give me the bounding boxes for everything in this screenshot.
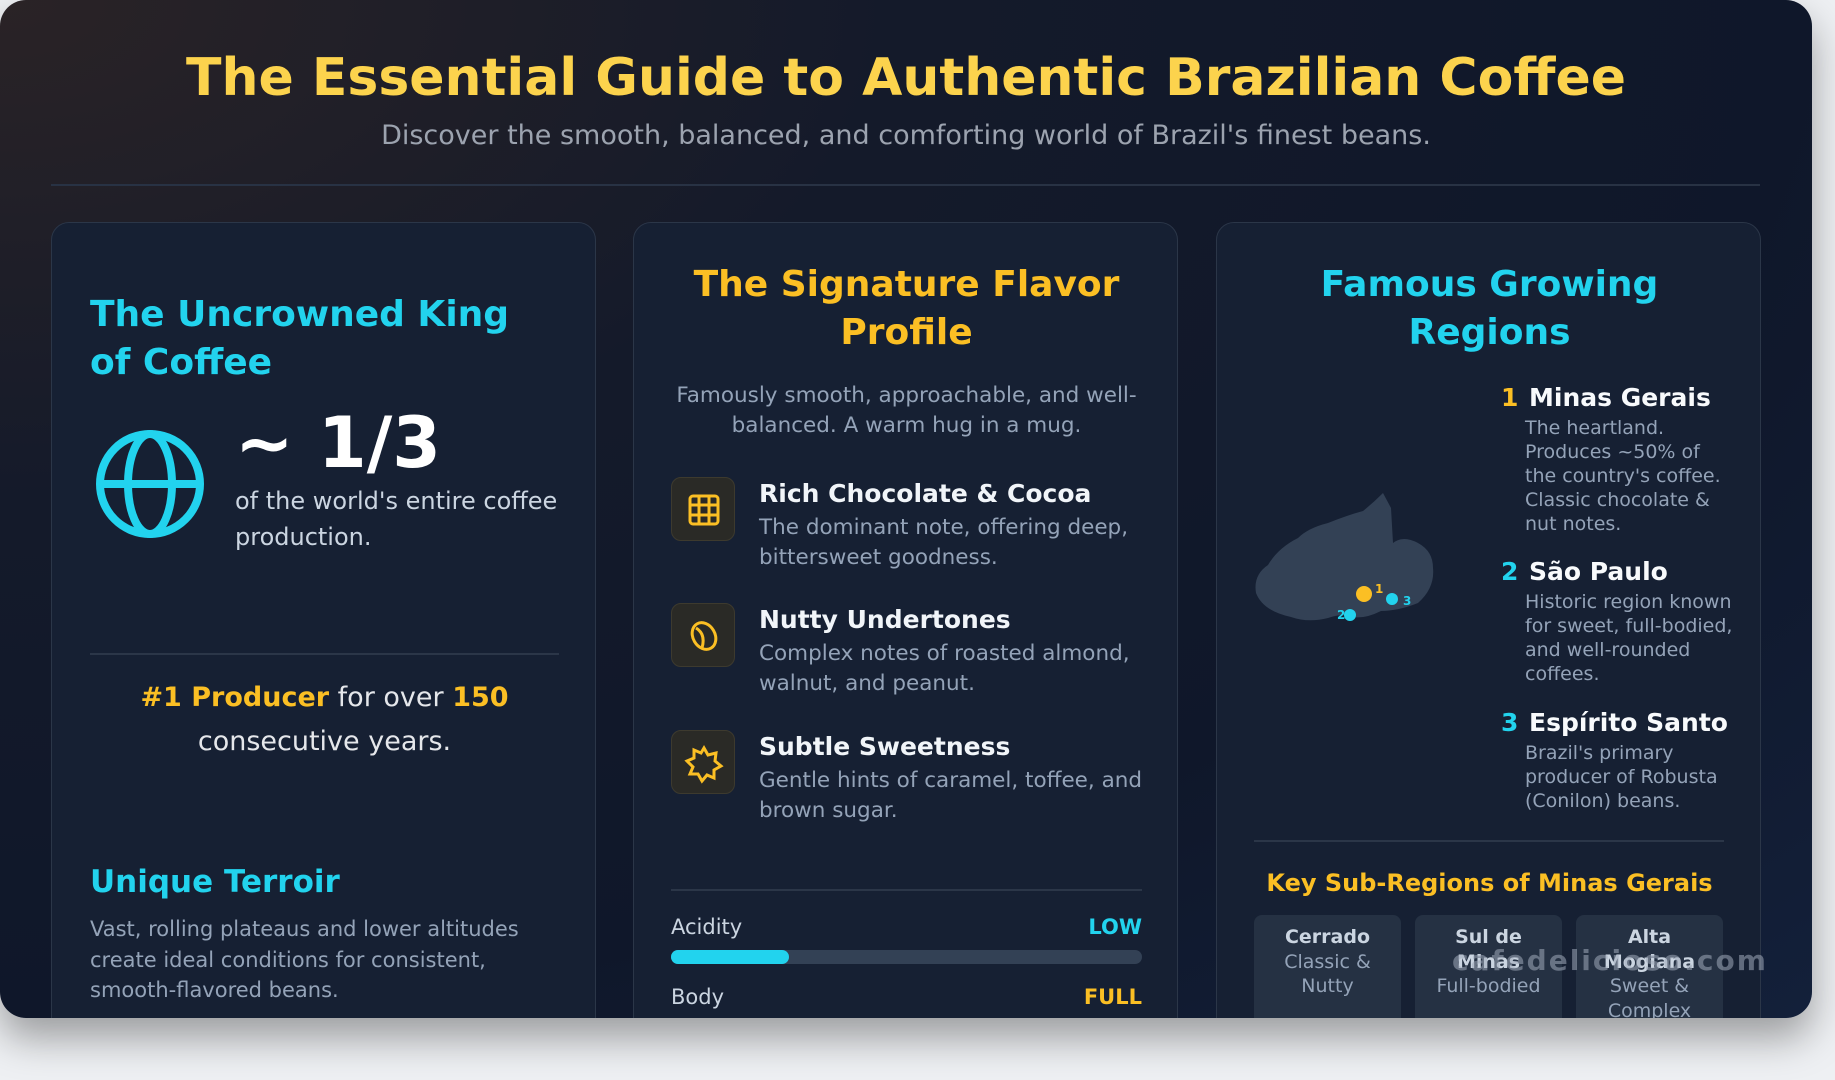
sub-region boxes: Classic & <box>1284 950 1371 972</box>
heading: Profile <box>840 312 973 353</box>
heading: Famous Growing <box>1321 264 1658 305</box>
heading <box>694 264 1120 353</box>
map <box>1256 493 1434 622</box>
chart: acidity: LOW <box>1088 915 1142 939</box>
region 3 <box>1501 708 1728 812</box>
sub-region boxes: Sul de <box>1455 926 1522 948</box>
panel: flavor profile <box>633 222 1178 1052</box>
heading: of Coffee <box>90 342 272 383</box>
sub-region boxes: Minas <box>1457 950 1520 972</box>
region 1 <box>1501 383 1721 535</box>
item: nutty: Nutty Undertones <box>759 605 1011 634</box>
item: sweetness: Gentle hints of caramel, toffee, and brown sugar. <box>759 768 1142 823</box>
producer stat: #1 Producer for over 150 <box>140 682 509 713</box>
sub-region boxes: Cerrado <box>1285 926 1370 948</box>
chart: acidity: Acidity <box>671 915 742 939</box>
sub-region boxes: Alta <box>1628 926 1671 948</box>
subtitle: Discover the smooth, balanced, and comforting world of Brazil's finest beans. <box>381 120 1431 151</box>
sub-region boxes: Sweet & <box>1610 975 1689 997</box>
region 2 <box>1501 557 1732 685</box>
producer stat <box>140 682 509 757</box>
heading: Regions <box>1408 312 1571 353</box>
item: chocolate: The dominant note, offering deep, bittersweet goodness. <box>759 515 1128 570</box>
region 2: 2 <box>1501 557 1518 586</box>
item: sweetness: Subtle Sweetness <box>759 732 1010 761</box>
stat: of the world's entire coffee production. <box>235 487 557 551</box>
region 3: Espírito Santo <box>1529 708 1728 737</box>
sub-regions heading: Key Sub-Regions of Minas Gerais <box>1266 869 1713 897</box>
description: Famously smooth, approachable, and well-balanced. A warm hug in a mug. <box>676 383 1137 438</box>
region 3: 3 <box>1501 708 1518 737</box>
item: chocolate <box>671 477 1128 570</box>
map: 1 <box>1375 582 1383 596</box>
region 1: Minas Gerais <box>1529 383 1711 412</box>
sub-region boxes: Nutty <box>1301 975 1354 997</box>
panel: king of coffee <box>51 222 596 1052</box>
icon: globe <box>96 430 204 538</box>
chart: body <box>671 985 1142 1009</box>
region 2: Historic region known for sweet, full-bodied, and well-rounded coffees. <box>1525 591 1732 685</box>
heading: The Uncrowned King <box>90 294 509 335</box>
heading <box>90 294 509 383</box>
terroir <box>90 864 519 1002</box>
chart: body: Body <box>671 985 724 1009</box>
watermark: cafedelicioso.com <box>1452 944 1768 977</box>
panel: regions <box>1216 222 1761 1052</box>
sub-region boxes: Mogiana <box>1604 950 1695 972</box>
chart: body: FULL <box>1084 985 1142 1009</box>
sub-region boxes: Full-bodied <box>1436 975 1541 997</box>
region 1: The heartland. Produces ~50% of the country's coffee. Classic chocolate & nut notes. <box>1525 417 1721 535</box>
heading <box>1321 264 1658 353</box>
map: 2 <box>1337 608 1345 622</box>
title: The Essential Guide to Authentic Brazilian Coffee <box>186 48 1626 108</box>
sub-region boxes <box>1254 915 1723 1018</box>
item: chocolate: Rich Chocolate & Cocoa <box>759 479 1091 508</box>
chart: acidity <box>671 915 1142 964</box>
region 2: São Paulo <box>1529 557 1668 586</box>
stat: ~ 1/3 <box>235 402 441 484</box>
stat <box>235 402 557 551</box>
map: 3 <box>1403 594 1411 608</box>
item: nutty: Complex notes of roasted almond, walnut, and peanut. <box>759 641 1130 696</box>
region 3: Brazil's primary producer of Robusta (Conilon) beans. <box>1525 742 1718 812</box>
item: nutty <box>671 603 1130 696</box>
heading: The Signature Flavor <box>694 264 1119 305</box>
terroir: Unique Terroir <box>90 864 340 900</box>
producer stat: consecutive years. <box>198 726 451 757</box>
terroir: Vast, rolling plateaus and lower altitudes create ideal conditions for consistent, smooth-flavored beans. <box>90 917 519 1002</box>
item: sweetness <box>671 730 1142 823</box>
region 1: 1 <box>1501 383 1518 412</box>
